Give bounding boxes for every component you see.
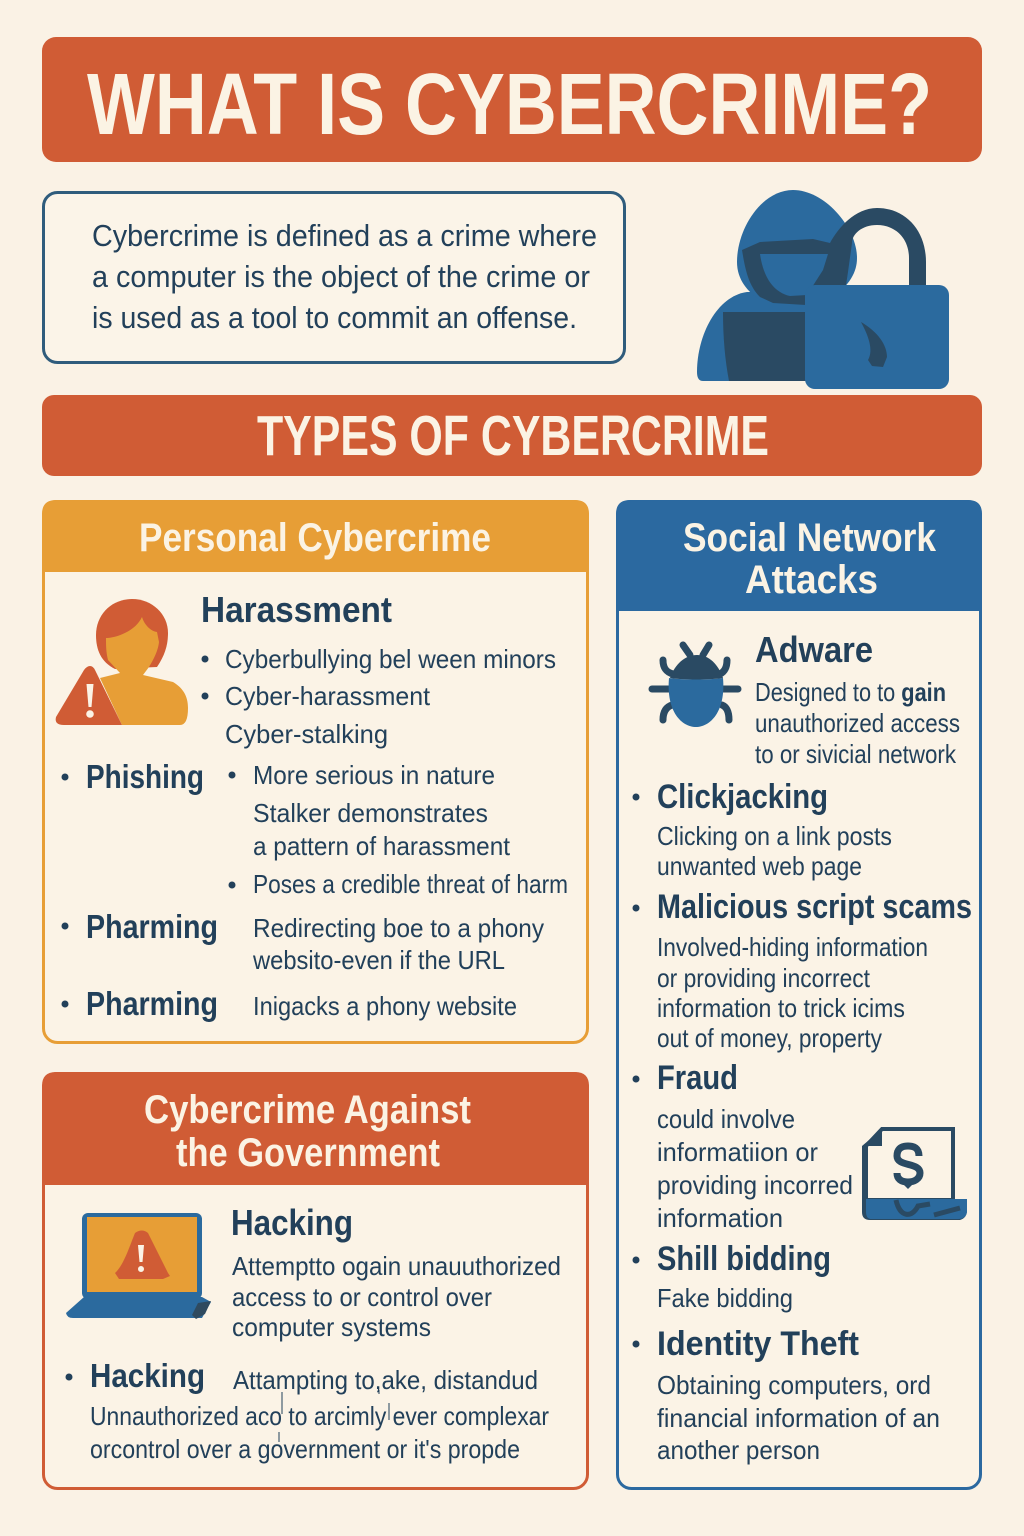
subsection: malicious script scams: Malicious script scams: [657, 888, 972, 926]
subsection: shill bidding: [632, 1240, 831, 1313]
definition text box: Cybercrime is defined as a crime where: [92, 218, 597, 253]
panel header: personal cybercrime: [42, 500, 589, 572]
definition text box: is used as a tool to commit an offense.: [92, 300, 577, 335]
subsection: adware: Adware: [755, 629, 873, 670]
subsection: phishing: a pattern of harassment: [253, 831, 511, 861]
subsection: identity theft: [632, 1325, 940, 1465]
subsection: hacking bullet: [66, 1357, 549, 1464]
subsection: adware: unauthorized access: [755, 708, 960, 738]
subsection: fraud: Fraud: [657, 1059, 738, 1097]
subsection: hacking definition: access to or control over: [232, 1282, 492, 1312]
panel: social network attacks: [616, 500, 982, 1488]
subsection: adware: [755, 629, 960, 769]
icon: hacker with padlock: [697, 190, 949, 389]
icon: laptop with warning: [66, 1213, 211, 1319]
subsection: pharming redirect: Redirecting boe to a phony: [253, 913, 544, 943]
icon: person with warning triangle: [56, 599, 188, 725]
subsection: fraud: information: [657, 1203, 783, 1233]
panel header: social network attacks: Social Network: [683, 516, 937, 560]
subsection: phishing: [62, 758, 568, 899]
subsection: pharming redirect: Pharming: [86, 908, 218, 945]
subsection: hacking bullet: Attampting to,ake, distandud: [233, 1365, 538, 1395]
subsection: identity theft: financial information of an: [657, 1403, 940, 1433]
subsection: phishing: Phishing: [86, 758, 204, 795]
subsection: harassment: Cyber-harassment: [225, 681, 431, 711]
panel header: cybercrime against the government: [42, 1072, 589, 1185]
panel header: social network attacks: [616, 500, 982, 611]
panel header: personal cybercrime: Personal Cybercrime: [139, 516, 491, 560]
subsection: adware: to or sivicial network: [755, 739, 957, 769]
panel: personal cybercrime: [42, 500, 589, 1042]
subsection: clickjacking: unwanted web page: [657, 851, 862, 881]
subsection: phishing: Stalker demonstrates: [253, 798, 488, 828]
subsection: hacking bullet: orcontrol over a government or it's propde: [90, 1434, 520, 1464]
subsection: identity theft: Identity Theft: [657, 1325, 859, 1363]
subsection: hacking definition: [231, 1202, 561, 1342]
subsection: harassment: Cyber-stalking: [225, 719, 388, 749]
subsection: pharming hijack: Inigacks a phony website: [253, 991, 517, 1021]
subsection: malicious script scams: [632, 888, 972, 1053]
subsection: pharming redirect: websito-even if the URL: [252, 945, 505, 975]
subsection: pharming hijack: [62, 985, 517, 1022]
subsection: hacking bullet: Hacking: [90, 1357, 205, 1394]
subsection: hacking definition: Attemptto ogain unauuthorized: [232, 1251, 561, 1281]
subsection: hacking definition: Hacking: [231, 1202, 353, 1243]
section banner: types of cybercrime: TYPES OF CYBERCRIME: [257, 404, 769, 468]
subsection: hacking definition: computer systems: [232, 1312, 431, 1342]
subsection: pharming redirect: [62, 908, 544, 975]
subsection: malicious script scams: out of money, property: [657, 1023, 882, 1053]
subsection: identity theft: Obtaining computers, ord: [657, 1370, 931, 1400]
subsection: shill bidding: Shill bidding: [657, 1240, 831, 1278]
definition text box: a computer is the object of the crime or: [92, 259, 590, 294]
subsection: phishing: Poses a credible threat of harm: [253, 869, 568, 899]
subsection: fraud: providing incorred: [657, 1170, 853, 1200]
subsection: hacking bullet: Unnauthorized aco to arcimly ever complexar: [90, 1401, 549, 1431]
subsection: malicious script scams: information to trick icims: [657, 993, 905, 1023]
definition text box: [44, 192, 624, 362]
subsection: pharming hijack: Pharming: [86, 985, 218, 1022]
subsection: harassment: Harassment: [201, 589, 392, 630]
subsection: fraud: [632, 1059, 853, 1233]
subsection: clickjacking: Clickjacking: [657, 778, 828, 816]
subsection: malicious script scams: or providing incorrect: [657, 963, 871, 993]
subsection: harassment: Cyberbullying bel ween minors: [225, 644, 556, 674]
subsection: fraud: informatiion or: [657, 1137, 818, 1167]
subsection: phishing: More serious in nature: [253, 760, 495, 790]
icon: bug: [652, 645, 738, 727]
subsection: harassment: [201, 589, 556, 749]
panel header: cybercrime against the government: the Government: [176, 1131, 440, 1175]
subsection: fraud: could involve: [657, 1104, 795, 1134]
subsection: clickjacking: Clicking on a link posts: [657, 821, 892, 851]
panel header: social network attacks: Attacks: [745, 558, 878, 602]
panel: cybercrime against the government: [42, 1072, 589, 1488]
panel header: cybercrime against the government: Cybercrime Against: [144, 1088, 471, 1132]
icon: document with dollar sign: [862, 1129, 967, 1220]
subsection: clickjacking: [632, 778, 892, 881]
section banner: types of cybercrime: [42, 395, 982, 476]
subsection: identity theft: another person: [657, 1435, 820, 1465]
subsection: adware: Designed to to gain: [755, 677, 946, 707]
subsection: malicious script scams: Involved-hiding information: [657, 932, 928, 962]
subsection: shill bidding: Fake bidding: [657, 1283, 793, 1313]
